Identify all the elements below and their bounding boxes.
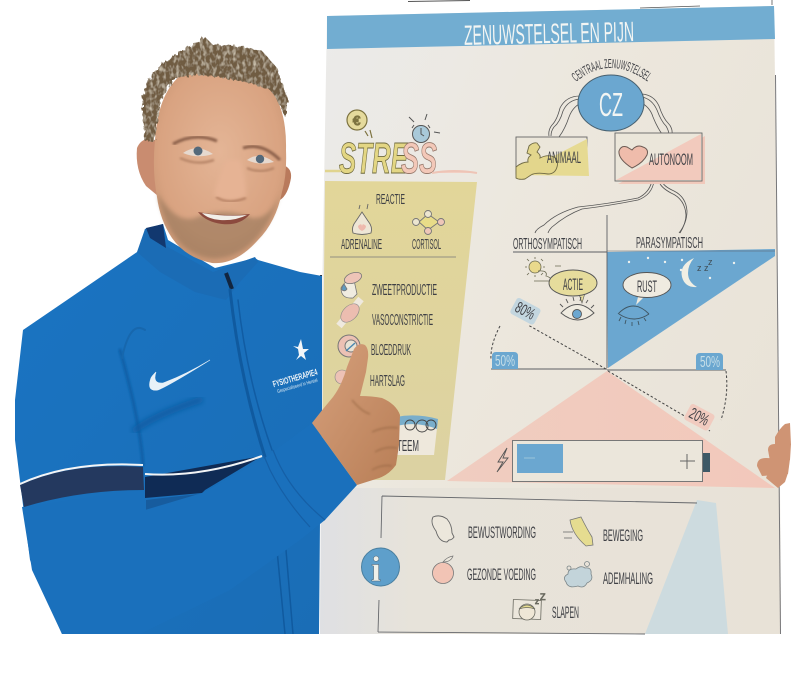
yellow reaction panel <box>322 181 477 480</box>
icon: adrenaline gland <box>352 204 372 234</box>
icon: lightning <box>497 448 508 472</box>
icon: nervous system card <box>396 415 438 455</box>
jacket logo <box>272 339 318 395</box>
face <box>137 37 291 263</box>
icon: sleeping head <box>513 592 546 620</box>
tag: 50% right <box>696 353 723 371</box>
nerve lines <box>535 94 687 233</box>
icon: heart <box>619 146 648 168</box>
icon: sleeping head: z <box>535 597 539 606</box>
speech bubble: rust: RUST <box>637 277 657 296</box>
stress heading: SS <box>401 134 437 183</box>
icon: alarm clock <box>409 114 440 142</box>
icon: cortisol molecule <box>412 210 444 234</box>
label: centraal zenuwstelsel <box>572 59 651 82</box>
icon: apple <box>432 556 454 584</box>
jacket shading <box>118 288 294 634</box>
icon: sun and cloud <box>525 257 561 281</box>
gauge: para dashed lines <box>608 371 727 431</box>
icon: brain <box>432 516 454 542</box>
panel: info tips: ADEMHALING <box>603 569 653 588</box>
jacket <box>15 224 357 634</box>
panel: info tips: BEWUSTWORDING <box>468 523 536 542</box>
panel: stress: CORTISOL <box>412 236 441 253</box>
icon: coin: € <box>353 113 361 128</box>
night stars and moon: z <box>708 257 713 267</box>
icon: swoosh logo <box>150 360 210 390</box>
label: centraal zenuwstelsel: CENTRAAL ZENUWSTELSEL <box>572 59 651 82</box>
panel: stress: ZWEETPRODUCTIE <box>372 282 437 299</box>
stubble <box>157 192 281 259</box>
pink energy triangle <box>447 371 775 488</box>
panel: nervous system diagram: PARASYMPATISCH <box>636 235 703 252</box>
icon: breath cloud <box>564 562 592 587</box>
title: ZENUWSTELSEL EN PIJN <box>464 16 634 51</box>
tag: 20% <box>683 403 716 432</box>
sleeve band <box>20 466 144 507</box>
panel: info tips: SLAPEN <box>552 603 579 622</box>
box: animaal <box>516 137 589 179</box>
box: autonoom: AUTONOOM <box>649 150 693 169</box>
night stars and moon <box>628 257 735 287</box>
gauge: ortho dashed lines <box>491 325 606 369</box>
tag: 50% left: 50% <box>495 353 515 370</box>
icon: blood pressure <box>338 335 360 357</box>
poster background <box>320 0 781 634</box>
icon: sleeping head: Z <box>540 592 546 602</box>
icon: info: i <box>371 549 381 589</box>
tag: 20%: 20% <box>686 405 712 430</box>
eyes <box>173 137 280 171</box>
icon: muscle arm <box>516 143 558 179</box>
icon: open eye <box>560 297 594 320</box>
nose <box>214 160 246 200</box>
box: autonoom <box>615 133 705 184</box>
right hand <box>757 423 791 488</box>
icon: sweat <box>341 270 363 298</box>
panel: stress: VASOCONSTRICTIE <box>372 312 433 329</box>
forearm sleeve <box>22 423 357 634</box>
head <box>154 72 286 263</box>
panel: stress: HARTSLAG <box>370 373 405 390</box>
panel: stress: ADRENALINE <box>341 236 382 253</box>
mouth <box>198 212 250 224</box>
title band <box>327 6 775 51</box>
panel: stress <box>322 110 477 480</box>
jacket collar <box>137 224 258 300</box>
speech bubble: actie: ACTIE <box>563 275 583 294</box>
icon: vasoconstriction <box>337 299 363 326</box>
tag: 50% left <box>492 352 518 370</box>
ears <box>137 139 158 196</box>
panel: nervous system diagram: ORTHOSYMPATISCH <box>513 236 582 253</box>
tag: 50% right: 50% <box>700 354 720 371</box>
icon: heart rate <box>335 370 349 384</box>
icon: nervous system card: TEEM <box>397 438 419 455</box>
tag: 80% <box>509 297 542 326</box>
circle: CZ <box>578 75 644 131</box>
panel: info tips: BEWEGING <box>603 526 643 545</box>
stress heading: STRE <box>339 134 409 183</box>
thumbs-up hand <box>312 344 400 485</box>
panel: info tips <box>362 496 728 634</box>
jacket logo: Gespecialiseerd in Herstel <box>276 378 318 395</box>
tag: 80%: 80% <box>512 299 538 324</box>
blue night triangle <box>607 249 775 368</box>
panel: stress: BLOEDDRUK <box>371 342 411 359</box>
jacket logo: FYSIOTHERAPIE4 <box>272 367 318 389</box>
hair <box>142 37 288 142</box>
panel: nervous system diagram <box>447 59 775 488</box>
circle: CZ: CZ <box>599 86 623 123</box>
icon: info <box>362 548 400 589</box>
panel: stress: REACTIE <box>376 191 405 208</box>
box: animaal: ANIMAAL <box>547 148 581 167</box>
torso band <box>145 456 262 498</box>
night stars and moon: z z <box>697 263 709 273</box>
speech bubble: rust <box>623 272 671 305</box>
battery <box>512 440 710 482</box>
speech bubble: actie <box>549 270 597 303</box>
icon: closed eye <box>618 306 649 326</box>
panel: info tips: GEZONDE VOEDING <box>467 565 536 584</box>
light blue wedge <box>645 500 728 634</box>
icon: coin <box>347 110 372 138</box>
icon: shoe <box>563 517 593 546</box>
